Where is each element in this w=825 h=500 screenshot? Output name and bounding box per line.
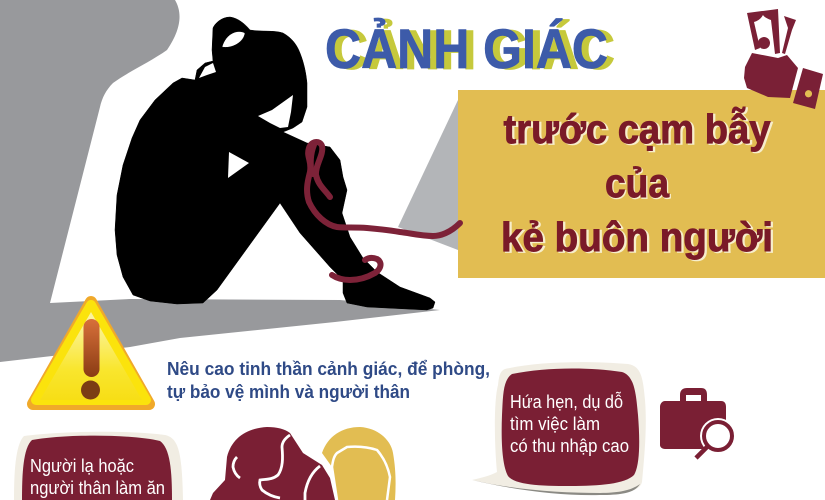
bubble text bbox=[510, 391, 629, 456]
speech bubble: job promises bbox=[472, 362, 646, 495]
subtitle light shadow: của bbox=[606, 161, 671, 207]
exclamation mark bbox=[84, 319, 100, 377]
subtitle main text: của bbox=[605, 160, 670, 206]
advice text: tự bảo vệ mình và người thân bbox=[167, 382, 410, 402]
speech bubble: strangers or relatives bbox=[14, 432, 183, 500]
bubble text: người thân làm ăn bbox=[30, 478, 165, 498]
blonde head bbox=[322, 427, 396, 500]
wall shadow behind title box bbox=[398, 100, 458, 250]
subtitle light shadow: kẻ buôn người bbox=[503, 215, 775, 261]
subtitle light shadow bbox=[503, 107, 775, 261]
advice text bbox=[167, 359, 490, 402]
rope bbox=[307, 142, 460, 280]
title box bbox=[458, 90, 825, 278]
white gap between arm and leg bbox=[228, 152, 249, 178]
white gap at face bbox=[258, 95, 293, 128]
subtitle bbox=[501, 106, 775, 261]
maroon head hair lines bbox=[233, 435, 320, 500]
icon: two faces bbox=[210, 427, 396, 500]
bubble text: có thu nhập cao bbox=[510, 436, 629, 456]
warning triangle icon bbox=[33, 302, 149, 404]
title: Cảnh giác: CẢNH GIÁC bbox=[332, 18, 615, 81]
icon: money in hand bbox=[744, 9, 823, 109]
bubble text: Người lạ hoặc bbox=[30, 456, 134, 476]
bubble text: tìm việc làm bbox=[510, 414, 600, 434]
blonde head face outline bbox=[332, 447, 390, 500]
advice text: Nêu cao tinh thần cảnh giác, để phòng, bbox=[167, 359, 490, 379]
icon: briefcase with magnifier bbox=[660, 388, 736, 458]
subtitle light shadow: trước cạm bẫy bbox=[506, 107, 773, 153]
bubble text bbox=[30, 456, 165, 498]
white gap in hair bbox=[199, 63, 216, 78]
subtitle main text: trước cạm bẫy bbox=[504, 106, 771, 152]
bubble text: Hứa hẹn, dụ dỗ bbox=[510, 391, 623, 412]
subtitle main text bbox=[501, 106, 773, 260]
background shadow shape bbox=[0, 0, 440, 362]
subtitle main text: kẻ buôn người bbox=[501, 214, 773, 260]
maroon head bbox=[210, 427, 335, 500]
silhouette of sitting girl bbox=[115, 17, 435, 310]
title: Cảnh giác: CẢNH GIÁC bbox=[325, 17, 608, 80]
